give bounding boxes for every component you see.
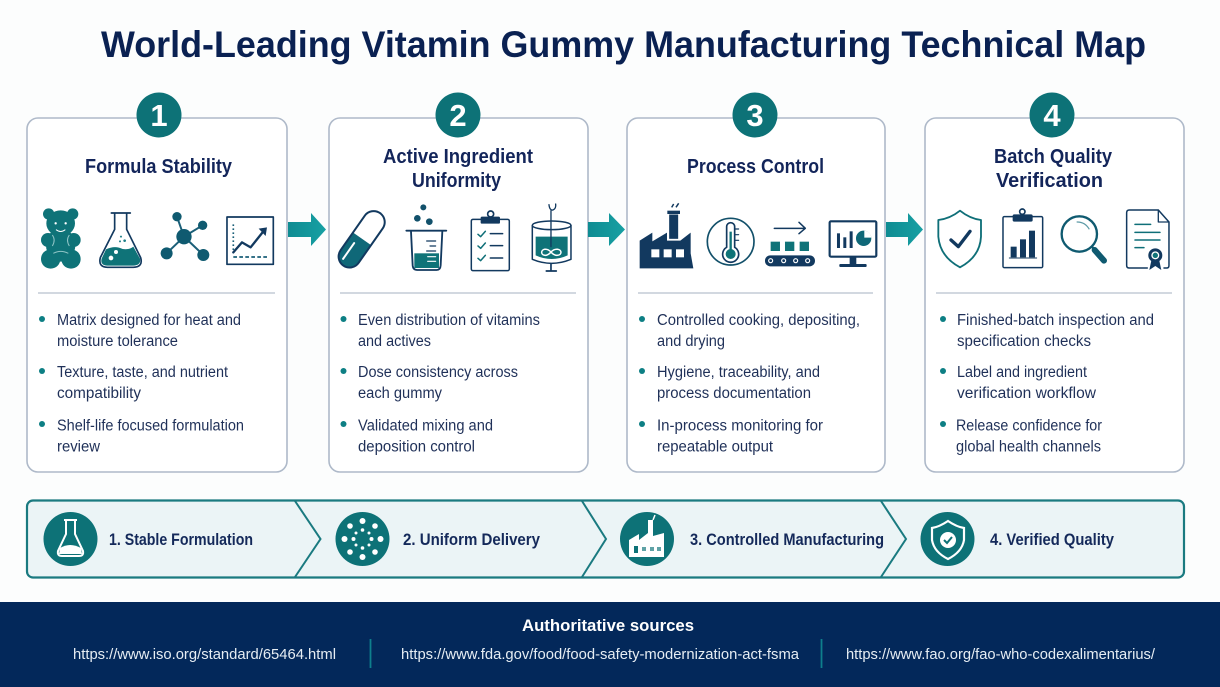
bullet list: specification checks — [957, 333, 1091, 350]
icon: clipboard bar chart — [1003, 209, 1043, 268]
icon: trend chart — [227, 217, 273, 264]
footer heading: Authoritative sources — [522, 616, 694, 635]
source link: FAO: https://www.fao.org/fao-who-codexalimentarius/ — [846, 646, 1156, 663]
heading — [383, 146, 533, 192]
bullet list: moisture tolerance — [57, 333, 178, 350]
chevron dividers — [295, 501, 906, 577]
band background — [27, 500, 1184, 578]
heading — [994, 146, 1113, 192]
panel: process control — [627, 92, 885, 472]
stage 3: controlled manufacturing: 3. Controlled Manufacturing — [690, 531, 884, 549]
step number 2: 2 — [449, 98, 467, 133]
bullet list: Texture, taste, and nutrient — [57, 364, 229, 381]
bullet list — [340, 312, 540, 456]
bullet list: deposition control — [358, 438, 475, 456]
footer background — [0, 602, 1220, 687]
title: World-Leading Vitamin Gummy Manufacturing Technical Map — [101, 23, 1146, 65]
stage 4: verified quality: 4. Verified Quality — [990, 531, 1115, 549]
footer: authoritative sources — [0, 602, 1220, 687]
stage 1: stable formulation — [44, 512, 253, 566]
bullet list: Label and ingredient — [957, 364, 1088, 381]
icon: checklist clipboard — [471, 211, 509, 271]
icon: thermometer — [707, 218, 754, 265]
panel: formula stability — [27, 92, 287, 472]
panel: active ingredient uniformity — [329, 92, 588, 472]
bullet list: and drying — [657, 333, 725, 350]
bullet list: compatibility — [57, 385, 141, 402]
source link: FDA: https://www.fda.gov/food/food-safety-modernization-act-fsma — [401, 646, 800, 663]
icon: capsule — [334, 207, 389, 272]
bullet list: Release confidence for — [956, 418, 1102, 434]
arrow: step 1 to 2 — [288, 213, 326, 246]
source link: ISO: https://www.iso.org/standard/65464.html — [73, 646, 336, 663]
step number 4: 4 — [1043, 98, 1061, 133]
bullet list: Matrix designed for heat and — [57, 312, 241, 329]
heading: Verification — [996, 170, 1103, 192]
step number 4 — [1030, 92, 1074, 138]
heading: Process Control — [687, 156, 824, 178]
panel: batch quality verification — [925, 92, 1184, 472]
icon row: capsule, beaker, checklist, mixer — [334, 204, 571, 272]
bullet list: In-process monitoring for — [657, 418, 823, 434]
divider — [936, 292, 1172, 294]
bullet list: Hygiene, traceability, and — [657, 364, 820, 381]
heading: Formula Stability — [85, 156, 233, 178]
bullet list — [639, 312, 860, 456]
bullet list: Controlled cooking, depositing, — [657, 312, 860, 329]
heading: Batch Quality — [994, 146, 1113, 168]
summary band — [27, 500, 1184, 578]
bullet list — [39, 312, 244, 456]
icon: monitor dashboard — [830, 221, 876, 267]
stage 2: uniform delivery — [336, 512, 541, 566]
step number 3: 3 — [746, 98, 764, 133]
icon row: factory, thermometer, conveyor, monitor — [640, 203, 876, 268]
bullet list: global health channels — [956, 438, 1101, 456]
bullet list: Validated mixing and — [358, 418, 493, 434]
bullet list: Even distribution of vitamins — [358, 312, 540, 329]
stage 2: uniform delivery: 2. Uniform Delivery — [403, 531, 541, 549]
card frame — [329, 118, 588, 472]
heading: Uniformity — [412, 170, 502, 192]
icon: molecule — [161, 212, 209, 261]
arrow: step 2 to 3 — [588, 213, 625, 246]
icon: flask — [100, 213, 141, 267]
icon: factory — [640, 203, 693, 268]
stage 1: stable formulation: 1. Stable Formulation — [109, 531, 253, 549]
bullet list: review — [57, 438, 101, 456]
icon: gummy bear — [41, 208, 81, 269]
card frame — [27, 118, 287, 472]
stage 3: controlled manufacturing — [620, 512, 884, 566]
icon: beaker — [406, 204, 446, 270]
icon: certificate document — [1127, 210, 1169, 270]
bullet list: verification workflow — [957, 385, 1097, 402]
card frame — [925, 118, 1184, 472]
divider — [340, 292, 576, 294]
bullet list: process documentation — [657, 385, 811, 402]
bullet list: Dose consistency across — [358, 364, 518, 381]
card frame — [627, 118, 885, 472]
step number 3 — [732, 92, 778, 138]
icon row: gummy bear, flask, molecule, chart — [41, 208, 273, 269]
step number 1 — [136, 92, 182, 138]
icon row: shield, report, magnifier, certificate — [938, 209, 1169, 270]
bullet list: Finished-batch inspection and — [957, 312, 1154, 329]
bullet list: Shelf-life focused formulation — [57, 418, 244, 434]
stage 4: verified quality — [920, 512, 1115, 566]
icon: conveyor belt — [765, 222, 815, 266]
step number 1: 1 — [150, 98, 168, 133]
divider — [638, 292, 873, 294]
icon: mixing tank — [532, 204, 571, 271]
icon: magnifier — [1062, 216, 1104, 261]
step number 2 — [436, 92, 480, 138]
icon: shield check — [938, 211, 981, 267]
bullet list: and actives — [358, 333, 431, 350]
bullet list: repeatable output — [657, 438, 774, 456]
arrow: step 3 to 4 — [886, 213, 923, 246]
divider — [38, 292, 275, 294]
bullet list: each gummy — [358, 385, 442, 402]
bullet list — [940, 312, 1154, 456]
heading: Active Ingredient — [383, 146, 533, 168]
